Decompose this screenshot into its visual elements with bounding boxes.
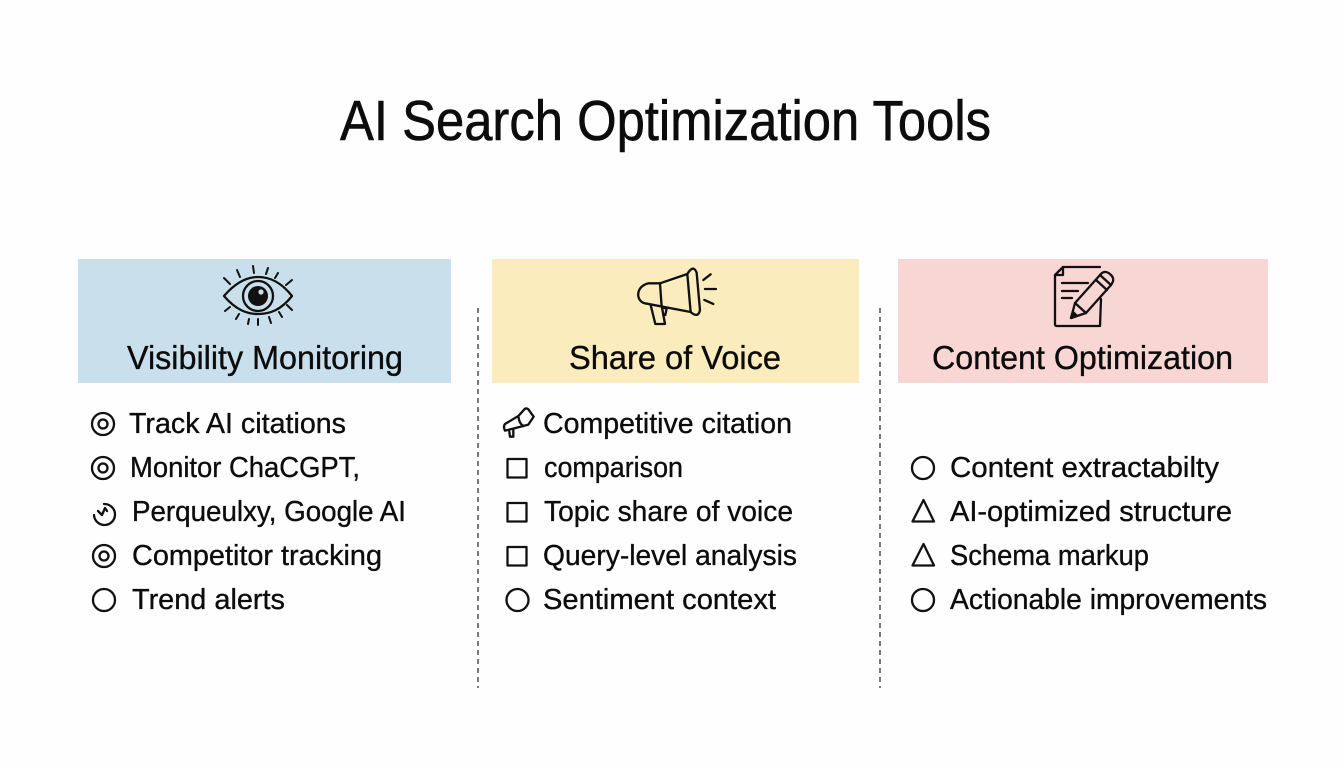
heading: content optimization: Content Optimization [932,339,1233,376]
panel: visibility monitoring [78,259,451,616]
list item: topic share of voice: Topic share of voice [544,496,793,528]
list item: competitor tracking: Competitor tracking [132,540,382,572]
list item: perqueulxy: Perqueulxy, Google AI [132,496,406,528]
header band: yellow [492,259,859,383]
heading: visibility monitoring: Visibility Monitoring [127,339,403,376]
header band: pink [898,259,1268,383]
list item: actionable improvements: Actionable improvements [950,584,1267,616]
icon: megaphone [638,269,716,324]
list item: trend alerts: Trend alerts [132,584,285,616]
list item: competitive citation: Competitive citation [543,408,792,440]
list item: query-level analysis: Query-level analysis [543,540,797,572]
icon: eye [224,266,292,325]
list item: AI-optimized structure: AI-optimized structure [950,496,1232,528]
list item: comparison: comparison [544,452,683,484]
panel: content optimization [898,259,1268,616]
list item: sentiment context: Sentiment context [543,584,776,616]
list item: monitor: Monitor ChaCGPT, [130,452,360,484]
panel: share of voice [492,259,859,616]
list item: content extractabilty: Content extractabilty [950,452,1220,484]
header band: blue [78,259,451,383]
list item: schema markup: Schema markup [950,540,1149,572]
list item: track AI citations: Track AI citations [129,408,346,440]
divider: left dashed [477,308,479,688]
icon: document and pencil [1055,267,1113,326]
heading: share of voice: Share of Voice [569,339,781,376]
divider: right dashed [879,308,881,688]
title: AI Search Optimization Tools [340,89,991,153]
